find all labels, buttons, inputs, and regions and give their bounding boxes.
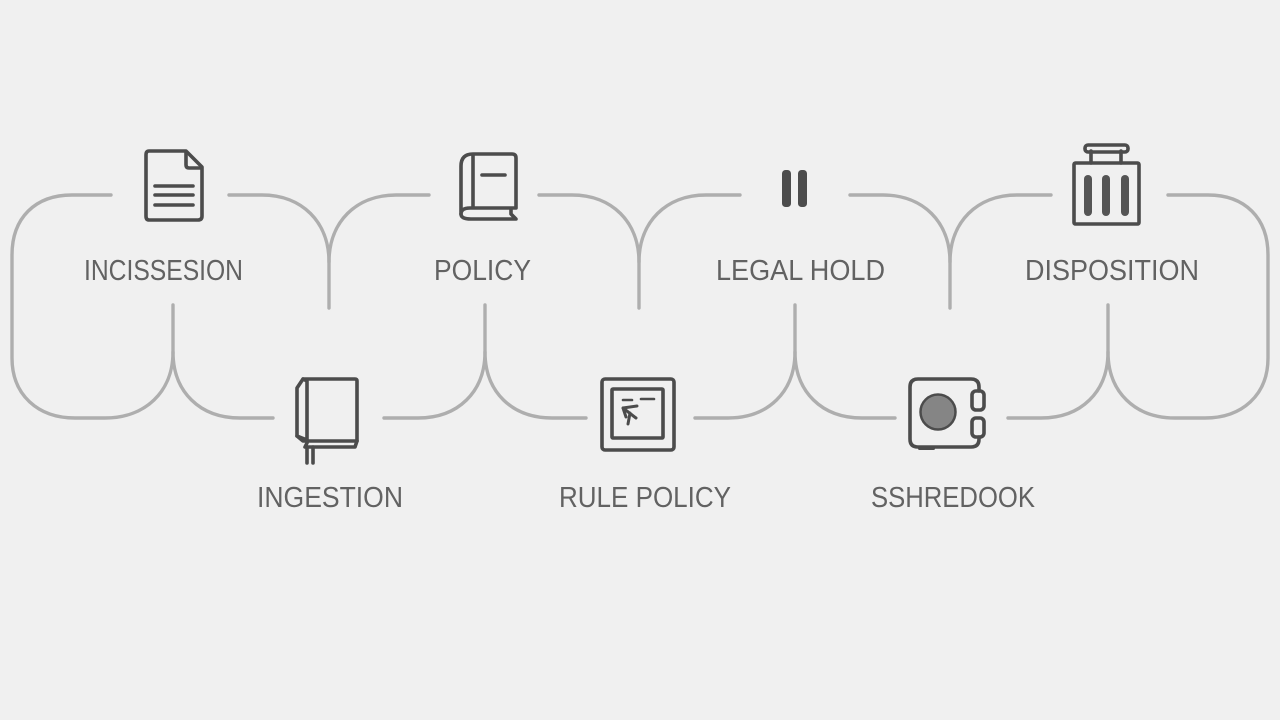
step: incision — [84, 151, 243, 287]
icon: pause bars — [782, 170, 807, 207]
label: shredook: SSHREDOOK — [871, 482, 1036, 514]
label: legal hold: LEGAL HOLD — [716, 255, 885, 287]
icon: trash bin — [1074, 145, 1139, 224]
label: incision: INCISSESION — [84, 255, 243, 287]
icon: closed book with dash — [461, 154, 516, 219]
step: legal hold — [716, 170, 885, 287]
step: ingestion — [257, 379, 403, 514]
step: rule policy — [559, 379, 731, 514]
safe dial — [920, 394, 956, 430]
label: rule policy: RULE POLICY — [559, 482, 731, 514]
label: policy: POLICY — [434, 255, 531, 287]
icon: document — [146, 151, 202, 220]
step: shredook — [871, 379, 1036, 514]
label: disposition: DISPOSITION — [1025, 255, 1199, 287]
icon: book with ribbon — [297, 379, 357, 463]
step: policy — [434, 154, 531, 287]
label: ingestion: INGESTION — [257, 482, 403, 514]
icon: framed rule with arrow — [602, 379, 674, 450]
icon: safe — [910, 379, 984, 450]
connector network — [12, 195, 1268, 418]
step: disposition — [1025, 145, 1199, 287]
